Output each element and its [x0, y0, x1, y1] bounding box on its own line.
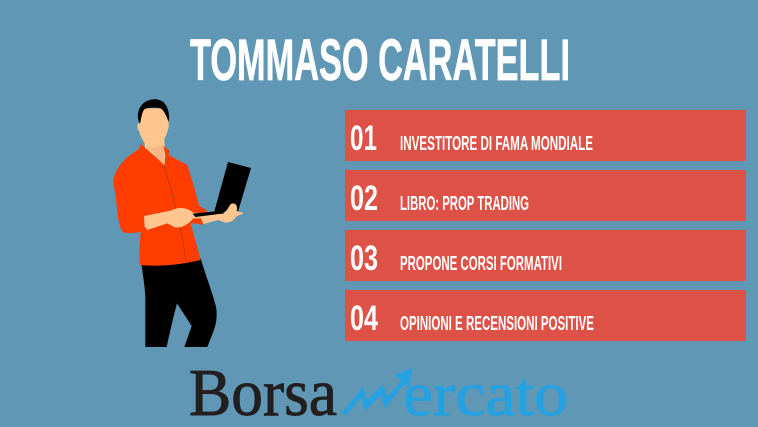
shirt placket — [164, 165, 186, 262]
logo: BorsaMercato — [189, 356, 568, 427]
head — [137, 108, 169, 148]
arms and hand — [144, 203, 243, 230]
trousers — [141, 258, 217, 347]
laptop screen — [214, 162, 251, 213]
number 04: 04 — [350, 299, 378, 338]
logo word ercato: ercato — [403, 361, 568, 427]
number 01: 01 — [350, 119, 377, 158]
laptop base — [193, 211, 224, 217]
illustration: man holding a laptop — [114, 99, 251, 347]
number 02: 02 — [350, 179, 378, 218]
number 03: 03 — [350, 239, 378, 278]
hair — [138, 99, 169, 124]
label 01: INVESTITORE DI FAMA MONDIALE — [400, 133, 593, 155]
label 04: OPINIONI E RECENSIONI POSITIVE — [400, 313, 594, 335]
logo arrow M — [342, 368, 412, 415]
neck — [144, 137, 165, 165]
shirt — [114, 144, 207, 266]
panel: item 04 — [345, 290, 746, 341]
panel: item 01 — [345, 110, 746, 161]
label 02: LIBRO: PROP TRADING — [400, 193, 529, 215]
panel: item 02 — [345, 170, 746, 221]
label 03: PROPONE CORSI FORMATIVI — [400, 253, 562, 275]
panel: item 03 — [345, 230, 746, 281]
